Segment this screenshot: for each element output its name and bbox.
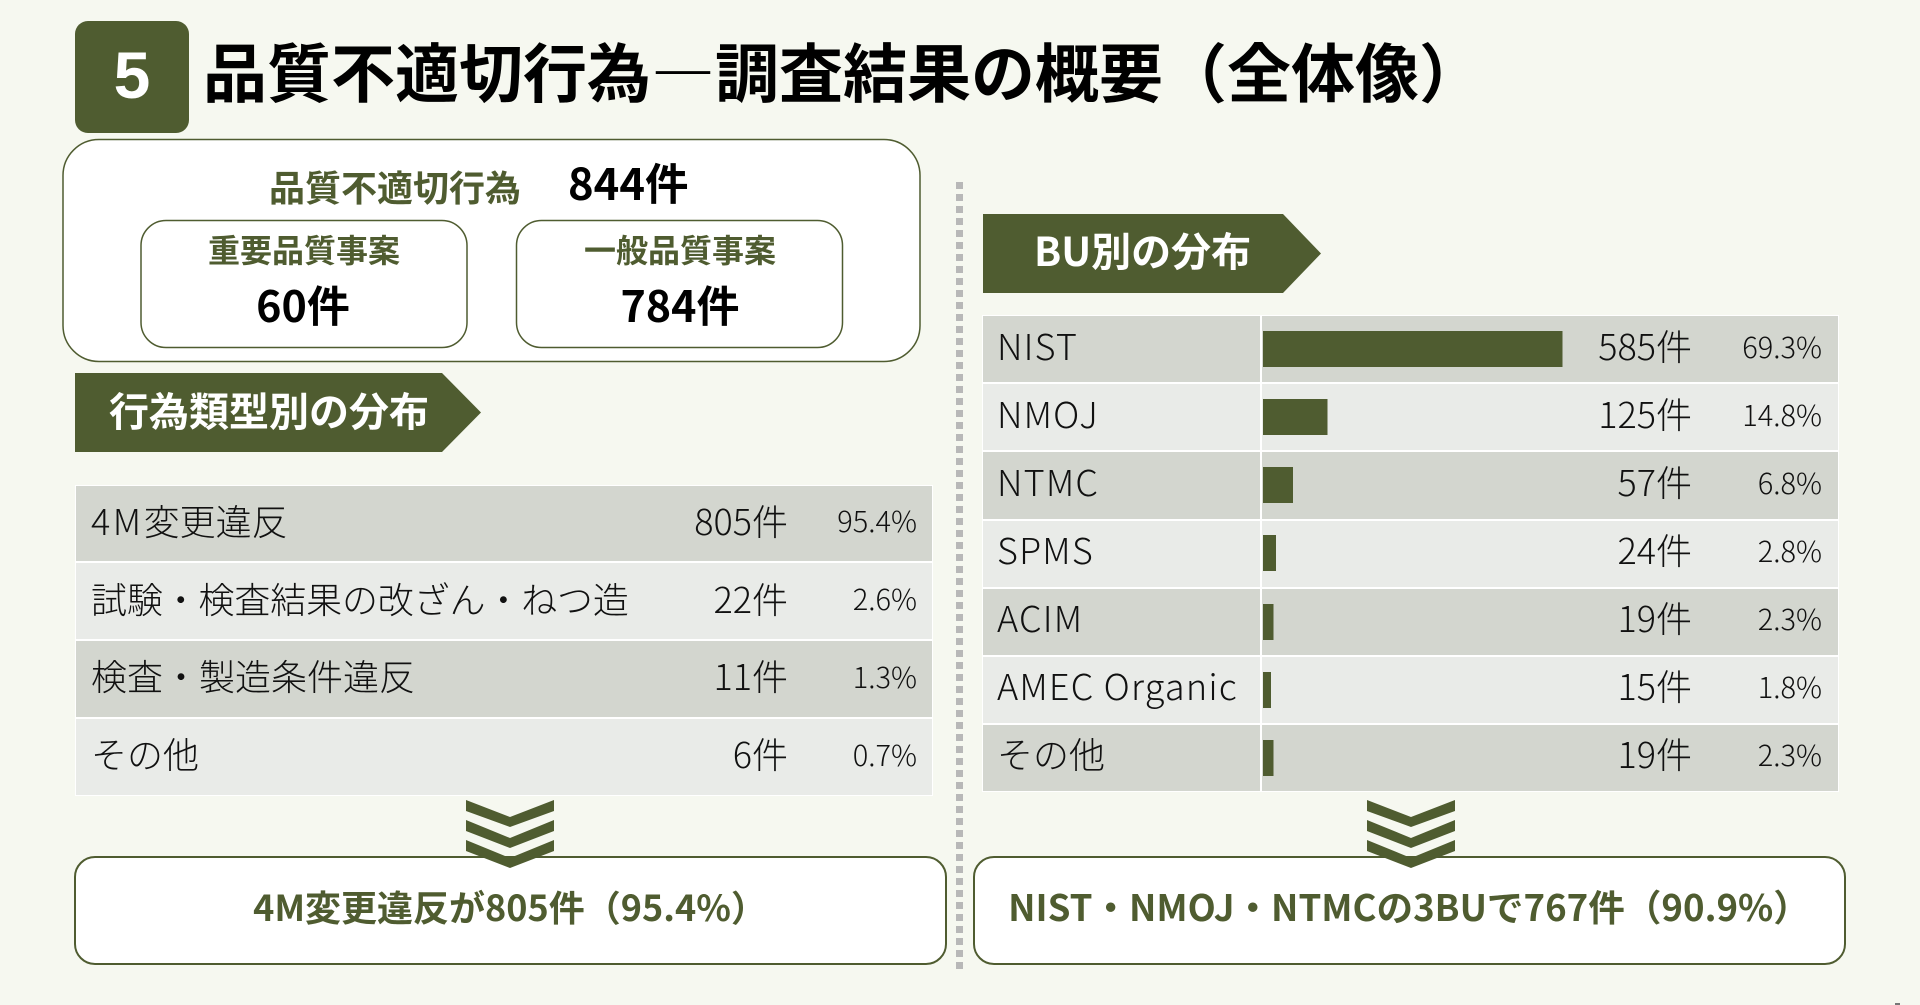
row: ACIM: 19件	[1617, 591, 1692, 643]
card: important quality cases	[141, 220, 467, 348]
row: NMOJ: 125件	[1598, 387, 1692, 439]
row: other: 6件	[733, 727, 788, 779]
row: SPMS: SPMS	[997, 523, 1094, 575]
row: inspection and manufacturing condition violation: 検査・製造条件違反	[91, 649, 415, 701]
row: NMOJ: NMOJ	[997, 387, 1099, 439]
row: AMEC Organic	[997, 659, 1822, 711]
card: general quality cases: 一般品質事案	[584, 226, 776, 272]
row: ACIM	[997, 591, 1822, 643]
row: SPMS	[997, 523, 1822, 575]
row: NMOJ	[997, 387, 1822, 439]
row: other: 0.7%	[853, 733, 917, 775]
table: distribution by BU	[982, 315, 1839, 792]
total value: 844件	[568, 150, 688, 213]
row: ACIM: 2.3%	[1758, 597, 1822, 639]
row: ACIM: ACIM	[997, 591, 1083, 643]
row: other: 19件	[1617, 727, 1692, 779]
row: other: 2.3%	[1758, 733, 1822, 775]
card: important quality cases: 60件	[256, 273, 350, 335]
row: NIST: 585件	[1598, 319, 1692, 371]
row: NMOJ: 14.8%	[1742, 393, 1822, 435]
conclusion box: right: NIST・NMOJ・NTMCの3BUで767件（90.9%）	[1008, 879, 1810, 932]
row: NIST: NIST	[997, 319, 1078, 371]
row: 4M change violation	[91, 494, 917, 546]
heading: distribution by act type: 行為類型別の分布	[109, 380, 429, 438]
row: NIST	[997, 319, 1822, 371]
row: falsification	[91, 572, 917, 624]
heading: distribution by BU: BU別の分布	[1034, 220, 1251, 278]
row: NTMC: NTMC	[997, 455, 1099, 507]
row: falsification: 22件	[713, 572, 788, 624]
conclusion box: right	[974, 857, 1845, 964]
row: SPMS: 2.8%	[1758, 529, 1822, 571]
arrow: right chevrons	[1367, 800, 1455, 868]
row: other	[91, 727, 917, 779]
card: important quality cases: 重要品質事案	[208, 226, 400, 272]
row: NTMC: 57件	[1617, 455, 1692, 507]
row: AMEC Organic: 15件	[1617, 659, 1692, 711]
row: inspection and manufacturing condition violation: 11件	[713, 649, 788, 701]
heading: distribution by act type	[75, 373, 481, 452]
conclusion box: left	[75, 857, 946, 964]
row: falsification: 2.6%	[853, 577, 917, 619]
row: AMEC Organic: AMEC Organic	[997, 659, 1238, 711]
card: general quality cases: 784件	[620, 273, 740, 335]
row: 4M change violation: 805件	[694, 494, 788, 546]
section number badge: 5	[114, 38, 150, 112]
row: NIST: 69.3%	[1742, 325, 1822, 367]
row: other: その他	[91, 727, 199, 779]
row: SPMS: 24件	[1617, 523, 1692, 575]
conclusion box: left: 4M変更違反が805件（95.4%）	[253, 880, 767, 932]
row: 4M change violation: 4M変更違反	[91, 494, 288, 546]
table: distribution by act type	[75, 485, 933, 796]
total label: 品質不適切行為	[269, 160, 521, 212]
row: other	[997, 727, 1822, 779]
section number badge	[75, 21, 189, 133]
arrow: left chevrons	[466, 800, 554, 868]
row: AMEC Organic: 1.8%	[1758, 665, 1822, 707]
heading: distribution by BU	[983, 214, 1321, 293]
card: general quality cases	[516, 220, 842, 348]
row: NTMC	[997, 455, 1822, 507]
row: other: その他	[997, 727, 1105, 779]
panel: total count	[63, 140, 920, 362]
row: falsification: 試験・検査結果の改ざん・ねつ造	[91, 572, 629, 624]
row: inspection and manufacturing condition violation	[91, 649, 917, 701]
row: 4M change violation: 95.4%	[837, 499, 917, 541]
row: NTMC: 6.8%	[1758, 461, 1822, 503]
title: 品質不適切行為―調査結果の概要（全体像）	[203, 24, 1483, 116]
row: inspection and manufacturing condition violation: 1.3%	[853, 655, 917, 697]
